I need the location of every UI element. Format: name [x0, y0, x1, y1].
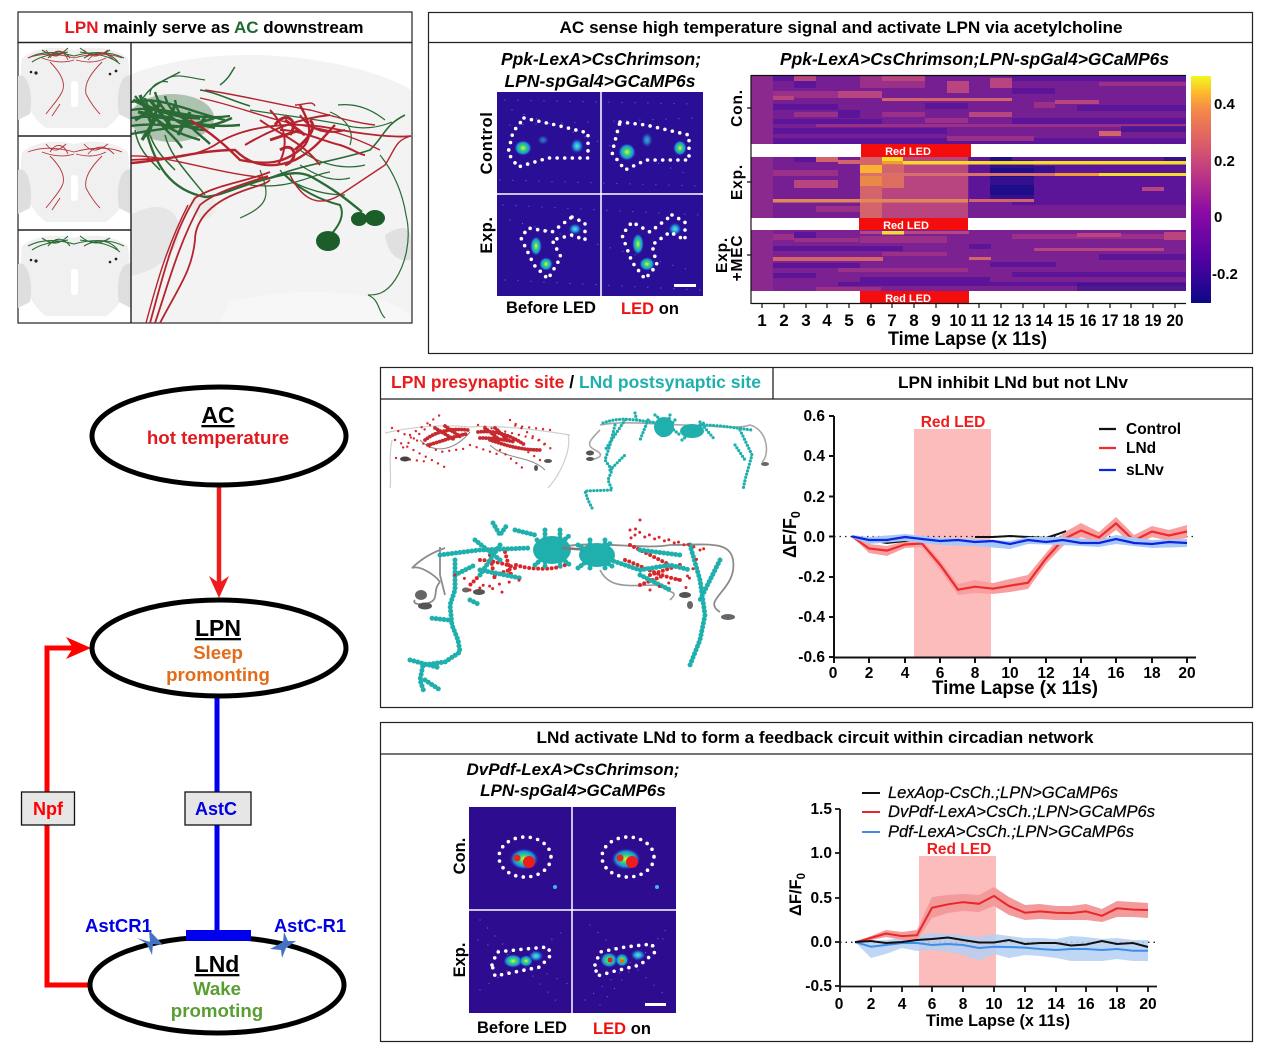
heatmap x axis numbers: 14 [1036, 311, 1053, 330]
panel title: LNd activate LNd to form a feedback circuit within circadian network [536, 729, 1094, 747]
line chart: LPN inhibit LNd [780, 408, 1196, 699]
imaging column labels: Before LED [477, 1019, 567, 1037]
node: LNd: Wake [193, 978, 241, 999]
heatmap x axis numbers: 18 [1122, 311, 1140, 330]
genotype label for imaging: LPN-spGal4>GCaMP6s [504, 71, 696, 91]
x axis numbers: 6 [928, 996, 937, 1013]
heatmap row labels: Con. [729, 89, 746, 127]
red LED window [914, 414, 991, 657]
x axis numbers: 0 [835, 996, 843, 1013]
heatmap x axis numbers: 17 [1102, 311, 1118, 330]
label: Npf: Npf [33, 799, 64, 819]
heatmap x axis numbers: 10 [950, 311, 966, 330]
heatmap x axis numbers: 11 [970, 311, 988, 330]
axes [829, 416, 1196, 663]
heatmap x axis numbers: 4 [822, 311, 832, 330]
heatmap x axis numbers: 13 [1014, 311, 1032, 330]
y axis numbers: -0.4 [798, 609, 825, 626]
x axis numbers: 4 [901, 665, 910, 682]
y axis numbers: -0.6 [798, 649, 825, 666]
heatmap x axis numbers: 2 [779, 311, 789, 330]
calcium imaging grid [469, 807, 676, 1013]
heatmap x axis numbers: 5 [844, 311, 854, 330]
panel: LPN mainly serve as AC downstream [18, 12, 412, 323]
colour bar: 0 [1214, 209, 1222, 226]
green cell bodies [316, 210, 385, 251]
x axis numbers: 2 [867, 996, 875, 1013]
heatmap row labels: Exp. [729, 164, 746, 200]
panel: LPN presynaptic and LNd postsynaptic sites [380, 367, 1252, 708]
y axis numbers: 0.6 [803, 408, 825, 425]
heatmap row labels: Exp. [714, 237, 731, 273]
colour bar [1191, 76, 1238, 303]
x axis title: Time Lapse (x 11s) [932, 678, 1098, 699]
x axis numbers [829, 665, 1196, 682]
legend: Pdf-LexA>CsCh.;LPN>GCaMP6s [888, 823, 1134, 841]
x axis title: Time Lapse (x 11s) [926, 1012, 1070, 1030]
node: AC: hot temperature [147, 427, 289, 448]
red LED bar 1: Red LED [885, 146, 931, 158]
x axis numbers: 14 [1047, 996, 1065, 1013]
panel title: LPN downstream of AC: LPN mainly serve as AC downstream [65, 18, 363, 37]
legend: Control [1126, 421, 1181, 438]
LPN presynaptic map [385, 415, 570, 488]
genotype label: DvPdf-LexA>CsChrimson; [466, 760, 680, 779]
line chart: LNd activates LPN [787, 784, 1157, 1030]
imaging column labels: LED on [593, 1020, 651, 1038]
x axis numbers: 18 [1108, 996, 1126, 1013]
panel title: inhibition: LPN inhibit LNd but not LNv [898, 374, 1129, 392]
y axis numbers [798, 408, 825, 666]
colour bar: 0.4 [1214, 96, 1236, 113]
red LED bar 2: Red LED [883, 220, 929, 232]
heatmap x axis numbers: 19 [1144, 311, 1162, 330]
y axis numbers: 0.0 [810, 934, 832, 951]
heatmap row labels [714, 89, 746, 281]
colour bar: 0.2 [1214, 153, 1235, 170]
y axis numbers: 0.4 [803, 448, 825, 465]
icon: receptor bolt left [137, 930, 163, 955]
x axis numbers: 4 [898, 996, 907, 1013]
heatmap x axis numbers: 12 [992, 311, 1010, 330]
imaging column labels [477, 1019, 651, 1038]
axes [835, 809, 1157, 992]
x axis numbers: 2 [865, 665, 873, 682]
imaging column labels [506, 299, 679, 318]
heatmap x axis numbers: 9 [931, 311, 941, 330]
x axis numbers: 12 [1016, 996, 1034, 1013]
y axis numbers: 1.0 [810, 845, 832, 862]
red LED window: Red LED [921, 414, 985, 431]
node: LPN: Sleep [193, 642, 243, 663]
node: AC: AC [201, 402, 235, 428]
panel title: AC sense high temperature signal and activate LPN via acetylcholine [560, 18, 1122, 37]
label: AstC: AstC [195, 799, 237, 819]
series: LexAop [855, 938, 1148, 947]
legend [1099, 421, 1181, 479]
x axis numbers: 16 [1077, 996, 1095, 1013]
node: LNd: promoting [171, 1000, 263, 1021]
red LED window: Red LED [927, 841, 991, 858]
heatmap x axis numbers: 8 [909, 311, 919, 330]
merged synaptic map [410, 520, 735, 692]
series: DvPdf-LexA [855, 887, 1148, 942]
heatmap x axis numbers [757, 311, 1184, 330]
heatmap x axis title: Time Lapse (x 11s) [888, 329, 1047, 350]
red LPN neuron arbors [131, 90, 411, 323]
x axis numbers: 12 [1037, 665, 1055, 682]
imaging column labels: LED on [621, 300, 679, 318]
y axis numbers [805, 801, 832, 995]
node: LPN [92, 600, 346, 696]
legend [862, 784, 1155, 841]
imaging row labels: Exp. [451, 943, 469, 977]
red LED bar 1 [861, 144, 971, 158]
y axis numbers: -0.2 [798, 569, 825, 586]
y axis numbers: 1.5 [810, 801, 832, 818]
x axis numbers: 16 [1107, 665, 1125, 682]
thumbnail: LPN red neuron [18, 142, 131, 222]
series: sLNv [852, 534, 1187, 549]
legend: DvPdf-LexA>CsCh.;LPN>GCaMP6s [888, 803, 1155, 821]
legend: LexAop-CsCh.;LPN>GCaMP6s [888, 784, 1118, 802]
x axis numbers: 14 [1072, 665, 1090, 682]
connector: LPN inhibits LNd via AstC [186, 697, 251, 941]
heatmap x axis numbers: 16 [1080, 311, 1096, 330]
heatmap x axis numbers: 6 [866, 311, 876, 330]
heatmap x axis numbers: 7 [887, 311, 897, 330]
main neuron reconstruction [130, 55, 411, 323]
heatmap section: control [751, 76, 1186, 144]
y axis title: 0 [789, 511, 803, 518]
panel title: synaptic sites: LPN presynaptic site / LNd postsynaptic site [391, 372, 761, 392]
flow diagram: circuit model [22, 387, 346, 1033]
label: AstCR1: AstCR1 [85, 916, 152, 936]
colour bar: -0.2 [1212, 266, 1238, 283]
legend: sLNv [1126, 462, 1164, 479]
node: LPN: promonting [166, 664, 270, 685]
x axis numbers: 6 [936, 665, 945, 682]
heatmap x axis numbers: 1 [757, 311, 767, 330]
x axis numbers: 18 [1143, 665, 1161, 682]
y axis title: ΔF/F [787, 879, 805, 916]
node: AC [92, 387, 346, 485]
icon: receptor bolt right [270, 932, 296, 958]
genotype label for heatmap: Ppk-LexA>CsChrimson;LPN-spGal4>GCaMP6s [780, 49, 1169, 69]
x axis numbers [835, 996, 1157, 1013]
y axis numbers: 0.0 [803, 529, 825, 546]
y axis numbers: 0.2 [803, 489, 825, 506]
y axis numbers: -0.5 [805, 978, 832, 995]
thumbnail: merged neurons [18, 48, 131, 128]
label: AstC [185, 792, 251, 825]
connector: LNd to LPN via Npf [47, 637, 91, 985]
y axis title: ΔF/F [780, 518, 800, 558]
arrow: AC to LPN [209, 487, 229, 598]
x axis numbers: 10 [1001, 665, 1019, 682]
imaging row labels: Control [478, 112, 496, 174]
imaging row labels [478, 112, 496, 254]
heatmap x axis numbers: 3 [801, 311, 811, 330]
node: LPN: LPN [195, 615, 241, 641]
label: AstC-R1: AstC-R1 [274, 916, 346, 936]
series: Pdf-LexA [855, 933, 1148, 961]
red LED bar 2 [859, 218, 968, 232]
red LED window [919, 841, 996, 986]
label: Npf [22, 792, 74, 825]
heatmap [747, 75, 1186, 308]
imaging column labels: Before LED [506, 299, 596, 317]
heatmap section: experimental [751, 157, 1186, 218]
imaging row labels [451, 838, 469, 977]
x axis numbers: 0 [829, 665, 837, 682]
x axis numbers: 8 [959, 996, 968, 1013]
panel: LNd feedback circuit [380, 722, 1252, 1042]
legend: LNd [1126, 440, 1156, 457]
genotype label for imaging: Ppk-LexA>CsChrimson; [501, 49, 701, 69]
LNd postsynaptic map [585, 413, 769, 508]
x axis numbers: 8 [971, 665, 980, 682]
heatmap x axis numbers: 20 [1166, 311, 1184, 330]
red LED bar 3 [860, 291, 969, 305]
genotype label: LPN-spGal4>GCaMP6s [480, 781, 666, 800]
series: LNd [852, 517, 1187, 595]
heatmap section: exp plus MEC [751, 230, 1186, 291]
series: control [852, 531, 1066, 543]
heatmap x axis numbers: 15 [1058, 311, 1074, 330]
panel: AC activate LPN via acetylcholine [428, 12, 1252, 354]
x axis numbers: 10 [985, 996, 1003, 1013]
node: LNd [90, 930, 344, 1033]
green AC neuron arbors [131, 67, 408, 318]
calcium imaging grid [497, 92, 703, 296]
y axis numbers: 0.5 [810, 890, 832, 907]
thumbnail: AC green neuron [18, 236, 131, 316]
heatmap row labels: +MEC [729, 235, 746, 281]
red LED bar 3: Red LED [885, 293, 931, 305]
y axis title: 0 [796, 873, 808, 879]
imaging row labels: Con. [451, 838, 469, 874]
imaging row labels: Exp. [478, 216, 496, 254]
x axis numbers: 20 [1178, 665, 1196, 682]
node: LNd: LNd [195, 951, 239, 977]
x axis numbers: 20 [1139, 996, 1157, 1013]
